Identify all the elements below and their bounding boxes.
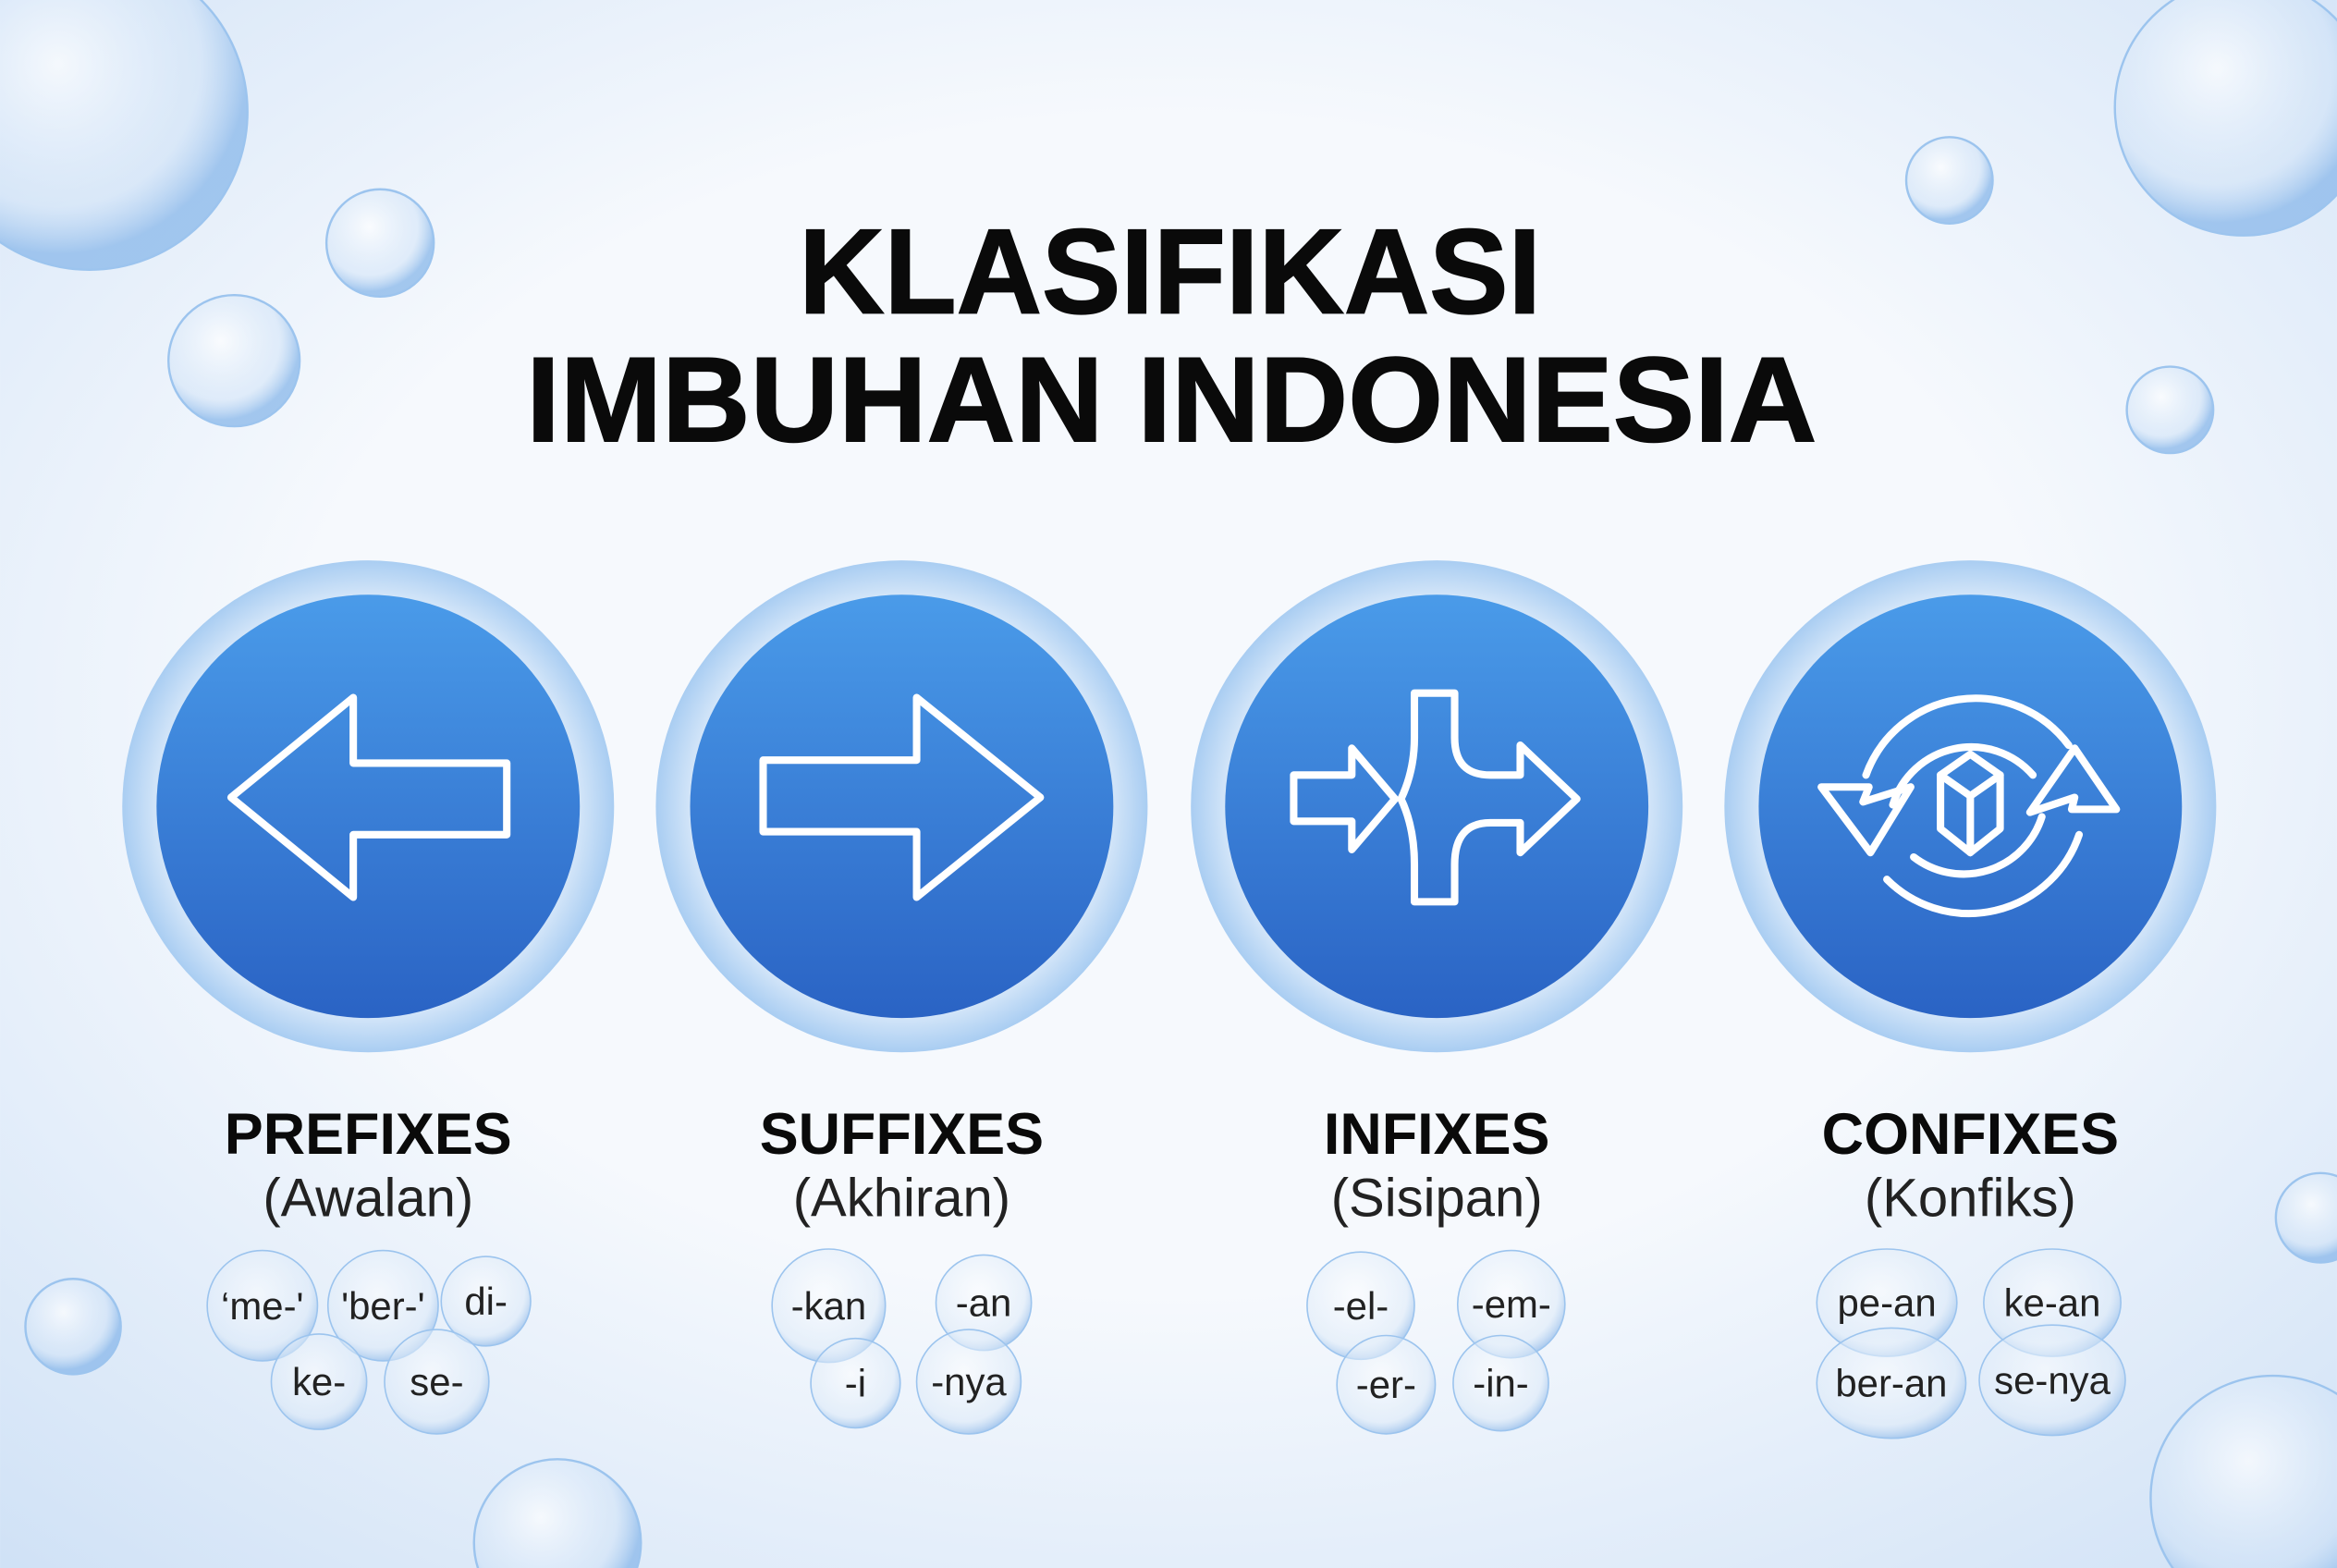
bubbles: prefix examples: 'ber-' [341, 1284, 425, 1328]
bubbles: prefix examples [207, 1251, 531, 1434]
panel: infixes [1191, 560, 1682, 1434]
bubbles: infix examples: -in- [1473, 1362, 1529, 1405]
bubbles: confix examples: pe-an [1837, 1281, 1937, 1325]
icon: merge arrows [1191, 560, 1682, 1052]
bubbles: confix examples: ke-an [2004, 1281, 2100, 1325]
bubbles: prefix examples: di- [464, 1280, 508, 1323]
bubbles: confix examples [1817, 1249, 2125, 1439]
bubbles: suffix examples: -kan [791, 1284, 866, 1328]
title [526, 204, 1817, 467]
bubbles: prefix examples: ke- [292, 1360, 346, 1403]
bubbles: infix examples: -em- [1472, 1282, 1551, 1326]
panel: prefixes [122, 560, 614, 1434]
bubbles: prefix examples: ‘me-' [221, 1284, 304, 1328]
bubbles: suffix examples: -an [956, 1281, 1011, 1325]
heading: infixes: INFIXES [1324, 1102, 1549, 1167]
bubbles: suffix examples [772, 1249, 1032, 1434]
heading: confixes [1822, 1102, 2119, 1229]
title: IMBUHAN INDONESIA [526, 332, 1817, 467]
bubbles: infix examples: -er- [1356, 1363, 1416, 1406]
bubbles: infix examples [1307, 1251, 1565, 1434]
heading: infixes: (Sisipan) [1331, 1169, 1543, 1229]
heading: prefixes: PREFIXES [225, 1102, 512, 1167]
panel: confixes [1724, 560, 2216, 1439]
heading: prefixes: (Awalan) [263, 1169, 473, 1229]
heading: confixes: (Konfiks) [1865, 1169, 2076, 1229]
bubbles: infix examples: -el- [1333, 1284, 1389, 1328]
heading: suffixes: (Akhiran) [793, 1169, 1010, 1229]
bubbles: confix examples: se-nya [1994, 1358, 2111, 1402]
heading: infixes [1324, 1102, 1549, 1229]
icon: cycle with cube [1724, 560, 2216, 1052]
heading: suffixes: SUFFIXES [760, 1102, 1044, 1167]
heading: confixes: CONFIXES [1822, 1102, 2119, 1167]
title: KLASIFIKASI [799, 204, 1541, 339]
heading: suffixes [760, 1102, 1044, 1229]
heading: prefixes [225, 1102, 512, 1229]
bubbles: suffix examples: -i [845, 1362, 866, 1405]
bubbles: prefix examples: se- [410, 1360, 464, 1403]
icon: left arrow [122, 560, 614, 1052]
panel: suffixes [655, 560, 1147, 1434]
bubbles: confix examples: ber-an [1835, 1362, 1947, 1405]
icon: right arrow [655, 560, 1147, 1052]
bubbles: suffix examples: -nya [931, 1360, 1007, 1403]
